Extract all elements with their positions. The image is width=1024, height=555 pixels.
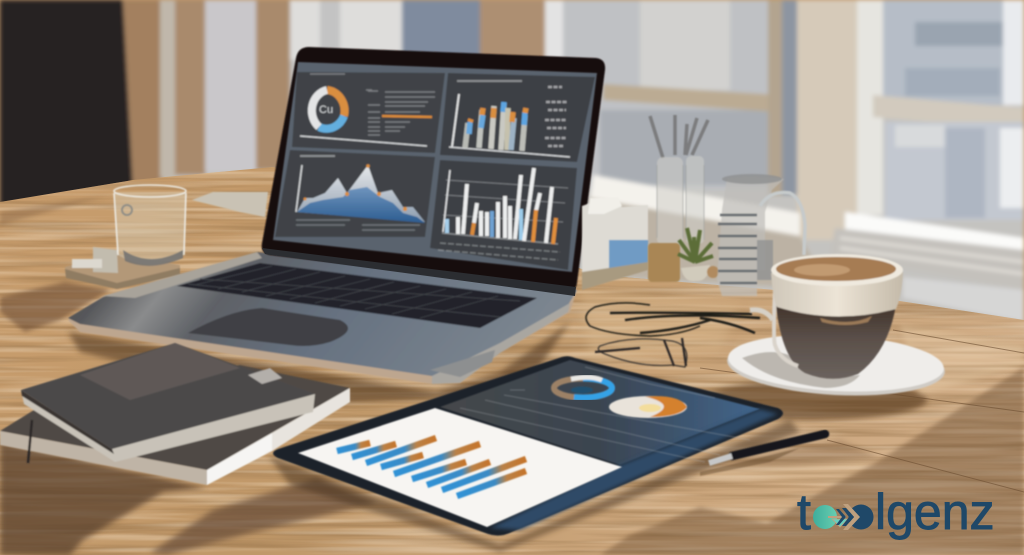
- tray on desk: [192, 192, 268, 217]
- tablet white chart section: [298, 408, 622, 527]
- screen panel: donut and table: [292, 72, 445, 153]
- screen panel: area chart: [275, 150, 435, 237]
- eyeglasses and cable: [586, 303, 773, 367]
- hinge strip: [262, 248, 576, 296]
- tablet: [268, 356, 825, 552]
- logo first o: teal circle: [813, 505, 848, 529]
- tablet shadow: [268, 420, 800, 552]
- screen panel: stacked bar chart: [440, 73, 595, 162]
- logo second o: navy circle with chevrons: [836, 504, 874, 530]
- logo letters lgenz: lgenz: [875, 484, 995, 540]
- tablet screen dark section: [440, 360, 760, 465]
- laptop screen: [273, 62, 597, 272]
- logo letter t: t: [797, 484, 811, 540]
- pen: [700, 434, 825, 476]
- white box with blue label: [582, 197, 648, 290]
- laptop base and keyboard deck: [68, 252, 577, 384]
- background: window wall: [0, 0, 1024, 330]
- coffee cup and saucer: [726, 254, 946, 401]
- logo: toolgenz: [797, 484, 995, 540]
- drinking glass on coaster: [65, 185, 186, 289]
- pens in glass jars: [650, 115, 708, 245]
- laptop lid: [262, 47, 605, 291]
- saucer: [726, 329, 946, 401]
- tablet pie chart: [609, 396, 687, 418]
- tablet bar chart: [337, 438, 526, 496]
- cork jar: [648, 243, 680, 282]
- upper notebook: [21, 343, 315, 463]
- tablet donut chart: [554, 377, 612, 398]
- glass water pitcher: [717, 174, 805, 296]
- cup body: [771, 254, 903, 379]
- tablet body: [273, 356, 783, 536]
- desk: wooden table top: [0, 160, 1024, 555]
- lower notebook: [0, 365, 350, 485]
- notebooks: [0, 343, 350, 485]
- tablet text lines: [460, 367, 750, 462]
- screen panel: donut and table: Cu: [319, 104, 333, 116]
- screen panel: column chart: [430, 160, 577, 270]
- potted plant: [678, 228, 719, 281]
- laptop: [68, 47, 605, 384]
